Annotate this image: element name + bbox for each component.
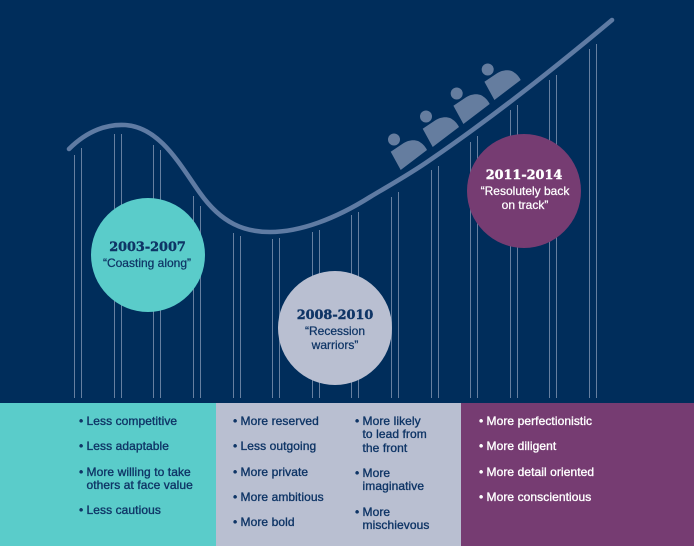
- panel: 2003-2007 traits: Less competitive: [86, 414, 177, 428]
- panel: 2008-2010 traits: •: [233, 515, 237, 529]
- circle: 2011-2014: “Resolutely back: [481, 184, 570, 198]
- circle: 2011-2014: 2011-2014: [486, 168, 562, 183]
- panel: 2008-2010 traits: •: [233, 414, 237, 428]
- circle: 2008-2010: [278, 271, 392, 385]
- panel: 2008-2010 traits: More ambitious: [240, 490, 324, 504]
- coaster riders: [388, 64, 521, 170]
- panel: 2008-2010 traits: More: [362, 505, 390, 519]
- roller coaster track: [69, 20, 612, 232]
- panel: 2011-2014 traits: More detail oriented: [486, 465, 594, 479]
- circle: 2011-2014: [467, 134, 581, 248]
- panel: 2011-2014 traits: [461, 403, 694, 546]
- panel: 2008-2010 traits: Less outgoing: [240, 439, 316, 453]
- panel: 2011-2014 traits: More perfectionistic: [486, 414, 592, 428]
- panel: 2008-2010 traits: to lead from: [362, 427, 427, 441]
- panel: 2003-2007 traits: •: [79, 503, 83, 517]
- circle: 2003-2007: 2003-2007: [109, 240, 186, 255]
- panel: 2003-2007 traits: •: [79, 465, 83, 479]
- panel: 2008-2010 traits: mischievous: [362, 518, 429, 532]
- panel: 2011-2014 traits: •: [479, 414, 483, 428]
- panel: 2008-2010 traits: More private: [240, 465, 308, 479]
- panel: 2003-2007 traits: •: [79, 439, 83, 453]
- panel: 2011-2014 traits: •: [479, 465, 483, 479]
- panel: 2008-2010 traits: More: [362, 466, 390, 480]
- panel: 2008-2010 traits: More reserved: [240, 414, 319, 428]
- rider 4: [482, 64, 521, 100]
- panel: 2008-2010 traits: the front: [362, 441, 408, 455]
- panel: 2008-2010 traits: imaginative: [362, 479, 424, 493]
- panel: 2011-2014 traits: •: [479, 439, 483, 453]
- panel: 2003-2007 traits: More willing to take: [86, 465, 191, 479]
- roller coaster supports: [74, 44, 596, 398]
- panel: 2003-2007 traits: others at face value: [86, 478, 193, 492]
- circle: 2003-2007: “Coasting along”: [103, 256, 191, 270]
- panel: 2008-2010 traits: [216, 403, 461, 546]
- panel: 2008-2010 traits: •: [355, 505, 359, 519]
- panel: 2008-2010 traits: •: [233, 439, 237, 453]
- panel: 2003-2007 traits: [0, 403, 216, 546]
- panel: 2003-2007 traits: Less adaptable: [86, 439, 169, 453]
- circle: 2011-2014: on track”: [502, 198, 548, 212]
- rider 3: [451, 88, 490, 124]
- panel: 2011-2014 traits: More conscientious: [486, 490, 591, 504]
- panel: 2008-2010 traits: More likely: [362, 414, 421, 428]
- panel: 2008-2010 traits: •: [233, 465, 237, 479]
- panel: 2008-2010 traits: •: [355, 466, 359, 480]
- circle: 2008-2010: warriors”: [311, 338, 358, 352]
- panel: 2011-2014 traits: More diligent: [486, 439, 557, 453]
- panel: 2003-2007 traits: Less cautious: [86, 503, 161, 517]
- panel: 2008-2010 traits: •: [355, 414, 359, 428]
- circle: 2008-2010: “Recession: [305, 324, 365, 338]
- panel: 2008-2010 traits: More bold: [240, 515, 295, 529]
- circle: 2003-2007: [91, 198, 205, 312]
- panel: 2011-2014 traits: •: [479, 490, 483, 504]
- circle: 2008-2010: 2008-2010: [297, 308, 373, 323]
- panel: 2003-2007 traits: •: [79, 414, 83, 428]
- panel: 2008-2010 traits: •: [233, 490, 237, 504]
- rider 2: [420, 110, 459, 147]
- rider 1: [388, 134, 427, 170]
